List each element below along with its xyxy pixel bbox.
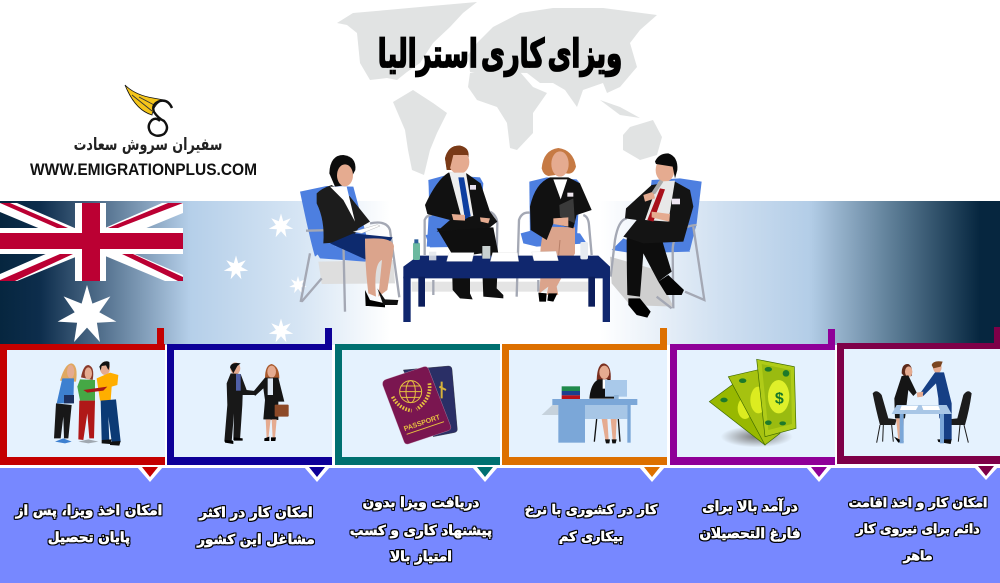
panel 6: business meeting (837, 327, 1000, 464)
logo (30, 85, 257, 179)
icon: handshake at table (873, 361, 972, 444)
panel frame (670, 329, 835, 465)
icon: passports (383, 366, 457, 444)
caption 6: امکان کار و اخذ اقامت (849, 495, 987, 510)
caption 6: ماهر (902, 548, 933, 563)
caption 5 (699, 498, 801, 542)
panel frame (837, 327, 1000, 464)
illustration: business panel discussion (300, 146, 704, 322)
commonwealth star (58, 285, 116, 342)
title: ویزای کاری استرالیا (378, 31, 622, 78)
union jack (0, 203, 183, 281)
caption 1 (15, 503, 162, 546)
caption 2 (196, 505, 315, 548)
panel frame (335, 344, 500, 465)
caption 2: امکان کار در اکثر (198, 505, 313, 521)
caption 5: درآمد بالا برای (702, 498, 798, 515)
australian flag (0, 203, 307, 342)
woman with brown hair (517, 148, 592, 302)
woman with notepad (300, 155, 399, 312)
caption 1: امکان اخذ ویزا، پس از (15, 503, 162, 519)
icon: three students reading (54, 361, 121, 446)
world map (337, 2, 662, 175)
caption 3 (350, 495, 492, 565)
panel 3: passports (335, 344, 500, 465)
icon: businessman and businesswoman shaking hands (224, 362, 289, 444)
caption 3: پیشنهاد کاری و کسب (350, 523, 492, 539)
bottles and glasses (413, 239, 588, 260)
caption 3: دریافت ویزا بدون (363, 495, 479, 511)
caption 2: مشاغل این کشور (196, 532, 315, 548)
man with blue tie (425, 146, 503, 299)
man with microphone (611, 153, 704, 318)
captions background (0, 468, 1000, 583)
company name: سفیران سروش سعادت (74, 134, 222, 155)
floor shadows (318, 257, 673, 307)
conference table (403, 239, 610, 322)
panel frame (0, 328, 165, 465)
background band with flag gradient (0, 201, 1000, 345)
icon: dollar bills: $ (775, 390, 784, 407)
panel 5: money (670, 329, 835, 465)
panel frame (502, 328, 667, 465)
icon: passports: PASSPORT (403, 414, 442, 433)
southern cross stars (224, 214, 307, 342)
caption 5: فارغ التحصیلان (699, 526, 801, 542)
panel frame (167, 328, 332, 465)
caption 1: پایان تحصیل (48, 530, 130, 546)
panel 2: handshake (167, 328, 332, 465)
caption 6 (849, 495, 987, 563)
caption 4 (525, 503, 658, 545)
caption 4: کار در کشوری با نرخ (525, 503, 658, 518)
icon: dollar bills (709, 359, 796, 447)
caption 4: بیکاری کم (559, 530, 623, 545)
caption 3: امتیاز بالا (390, 549, 452, 565)
name cards (447, 251, 558, 261)
panel 1: students (0, 328, 165, 465)
icon: winged swan logo (125, 85, 172, 136)
website address: WWW.EMIGRATIONPLUS.COM (30, 160, 257, 179)
panel 4: office desk (502, 328, 667, 465)
pointer triangles (137, 466, 999, 482)
caption 6: دائم برای نیروی کار (855, 521, 980, 536)
icon: woman working at desk (542, 363, 637, 443)
